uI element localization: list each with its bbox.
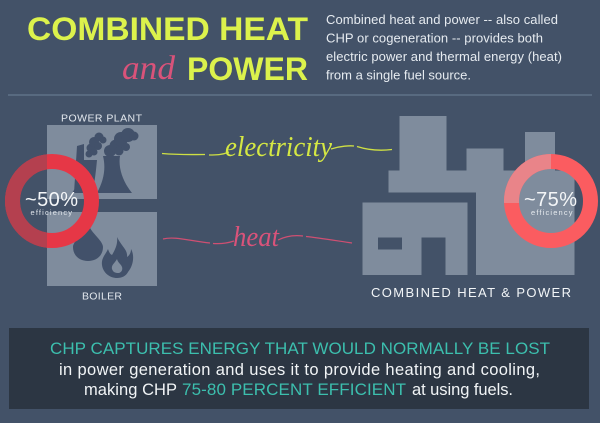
icon: fuel drop (73, 222, 103, 261)
title: POWER (187, 51, 308, 87)
intro paragraph: from a single fuel source. (326, 68, 471, 82)
callout line 3: 75-80 PERCENT EFFICIENT (182, 380, 406, 399)
text: efficiency: efficiency (30, 208, 72, 217)
title (27, 11, 308, 87)
intro paragraph: Combined heat and power -- also called (326, 12, 558, 27)
75% efficiency ring (512, 162, 590, 240)
power plant panel (47, 125, 157, 199)
callout line 3: making CHP (84, 381, 177, 399)
text: electricity: electricity (225, 131, 332, 163)
boiler panel (47, 212, 157, 286)
title: COMBINED HEAT (27, 11, 308, 47)
icon: flame (102, 237, 133, 278)
50% efficiency ring (12, 162, 92, 240)
callout line 2: in power generation and uses it to provide heating and cooling, (59, 361, 540, 379)
text: 75 percent: ~75% (524, 189, 577, 211)
label: combined heat and power: COMBINED HEAT & POWER (371, 285, 571, 300)
text: 50 percent: ~50% (25, 189, 78, 211)
icon: combined heat and power factory (388, 116, 574, 275)
text: efficiency: efficiency (531, 208, 573, 217)
callout line 3: at using fuels. (412, 381, 513, 399)
callout panel (9, 328, 589, 409)
label: power plant: POWER PLANT (61, 112, 143, 124)
text: heat: heat (233, 222, 280, 253)
callout line 1: CHP CAPTURES ENERGY THAT WOULD NORMALLY BE LOST (50, 339, 550, 358)
label: boiler: BOILER (82, 290, 122, 302)
icon: power plant (72, 128, 138, 193)
icon: factory lower building (362, 202, 468, 275)
intro paragraph (326, 12, 562, 82)
heat arrow (163, 222, 352, 253)
electricity arrow (162, 131, 392, 163)
intro paragraph: CHP or cogeneration -- provides both (326, 30, 543, 46)
title script word: and: and (122, 50, 176, 87)
intro paragraph: electric power and thermal energy (heat) (326, 49, 562, 64)
